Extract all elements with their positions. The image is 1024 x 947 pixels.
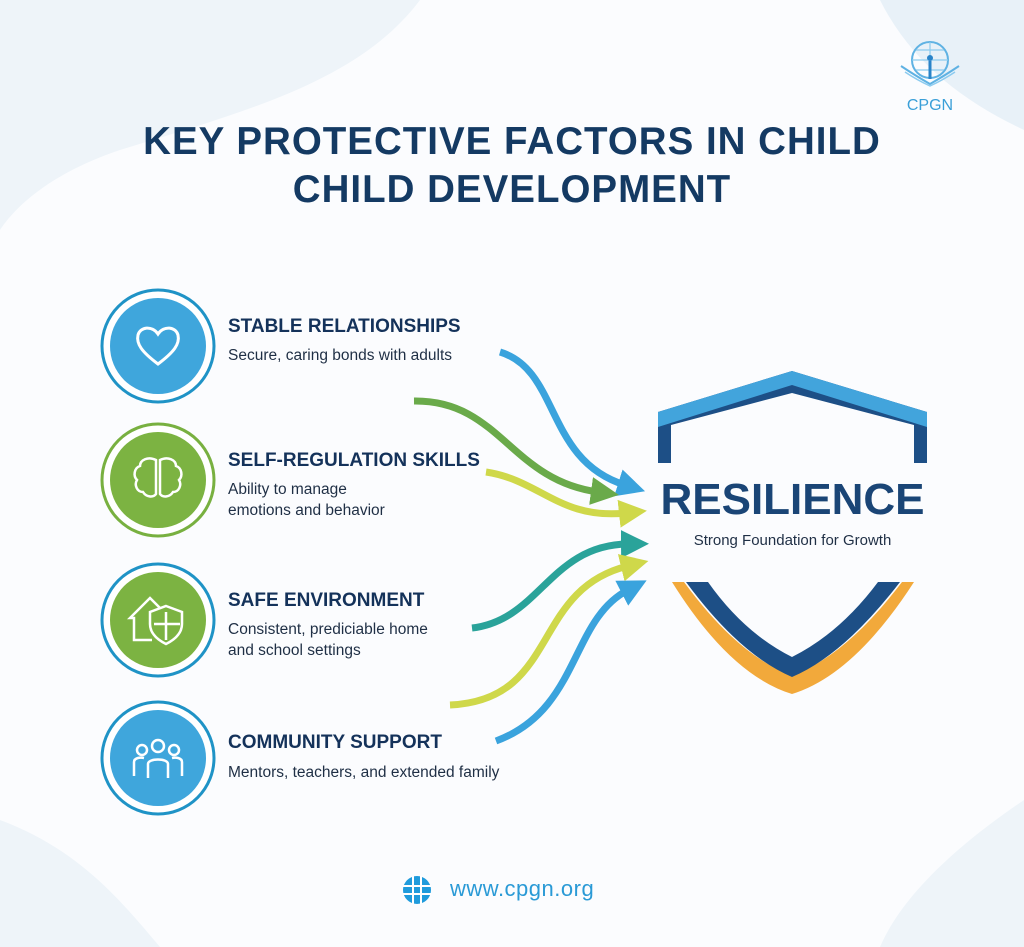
shield: resilience: RESILIENCE <box>660 475 925 524</box>
factor: community support <box>100 700 500 816</box>
factor: stable relationships: STABLE RELATIONSHIPS <box>228 316 461 337</box>
shield: resilience <box>658 371 927 694</box>
factor: safe environment: and school settings <box>228 642 361 659</box>
factor: safe environment: SAFE ENVIRONMENT <box>228 590 424 611</box>
factor: community support: COMMUNITY SUPPORT <box>228 732 442 753</box>
title: KEY PROTECTIVE FACTORS IN CHILD <box>143 120 881 163</box>
factor: self-regulation: SELF-REGULATION SKILLS <box>228 450 480 471</box>
factor: stable relationships: Secure, caring bonds with adults <box>228 347 452 364</box>
factor: self-regulation <box>100 422 480 538</box>
footer: website <box>403 876 594 904</box>
logo: CPGN: CPGN <box>907 97 953 114</box>
icon: brain <box>100 422 216 538</box>
factor: self-regulation: emotions and behavior <box>228 502 385 519</box>
icon: heart <box>100 288 216 404</box>
factor: self-regulation: Ability to manage <box>228 481 347 498</box>
factor: safe environment: Consistent, prediciable home <box>228 621 428 638</box>
icon: people <box>100 700 216 816</box>
factor: stable relationships <box>100 288 461 404</box>
footer: website: www.cpgn.org <box>450 876 594 901</box>
shield: resilience: Strong Foundation for Growth <box>694 532 891 549</box>
title: CHILD DEVELOPMENT <box>293 168 731 211</box>
icon: house shield <box>100 562 216 678</box>
title <box>143 120 881 211</box>
factor: community support: Mentors, teachers, and extended family <box>228 764 499 781</box>
logo: CPGN <box>900 41 960 114</box>
factor: safe environment <box>100 562 428 678</box>
